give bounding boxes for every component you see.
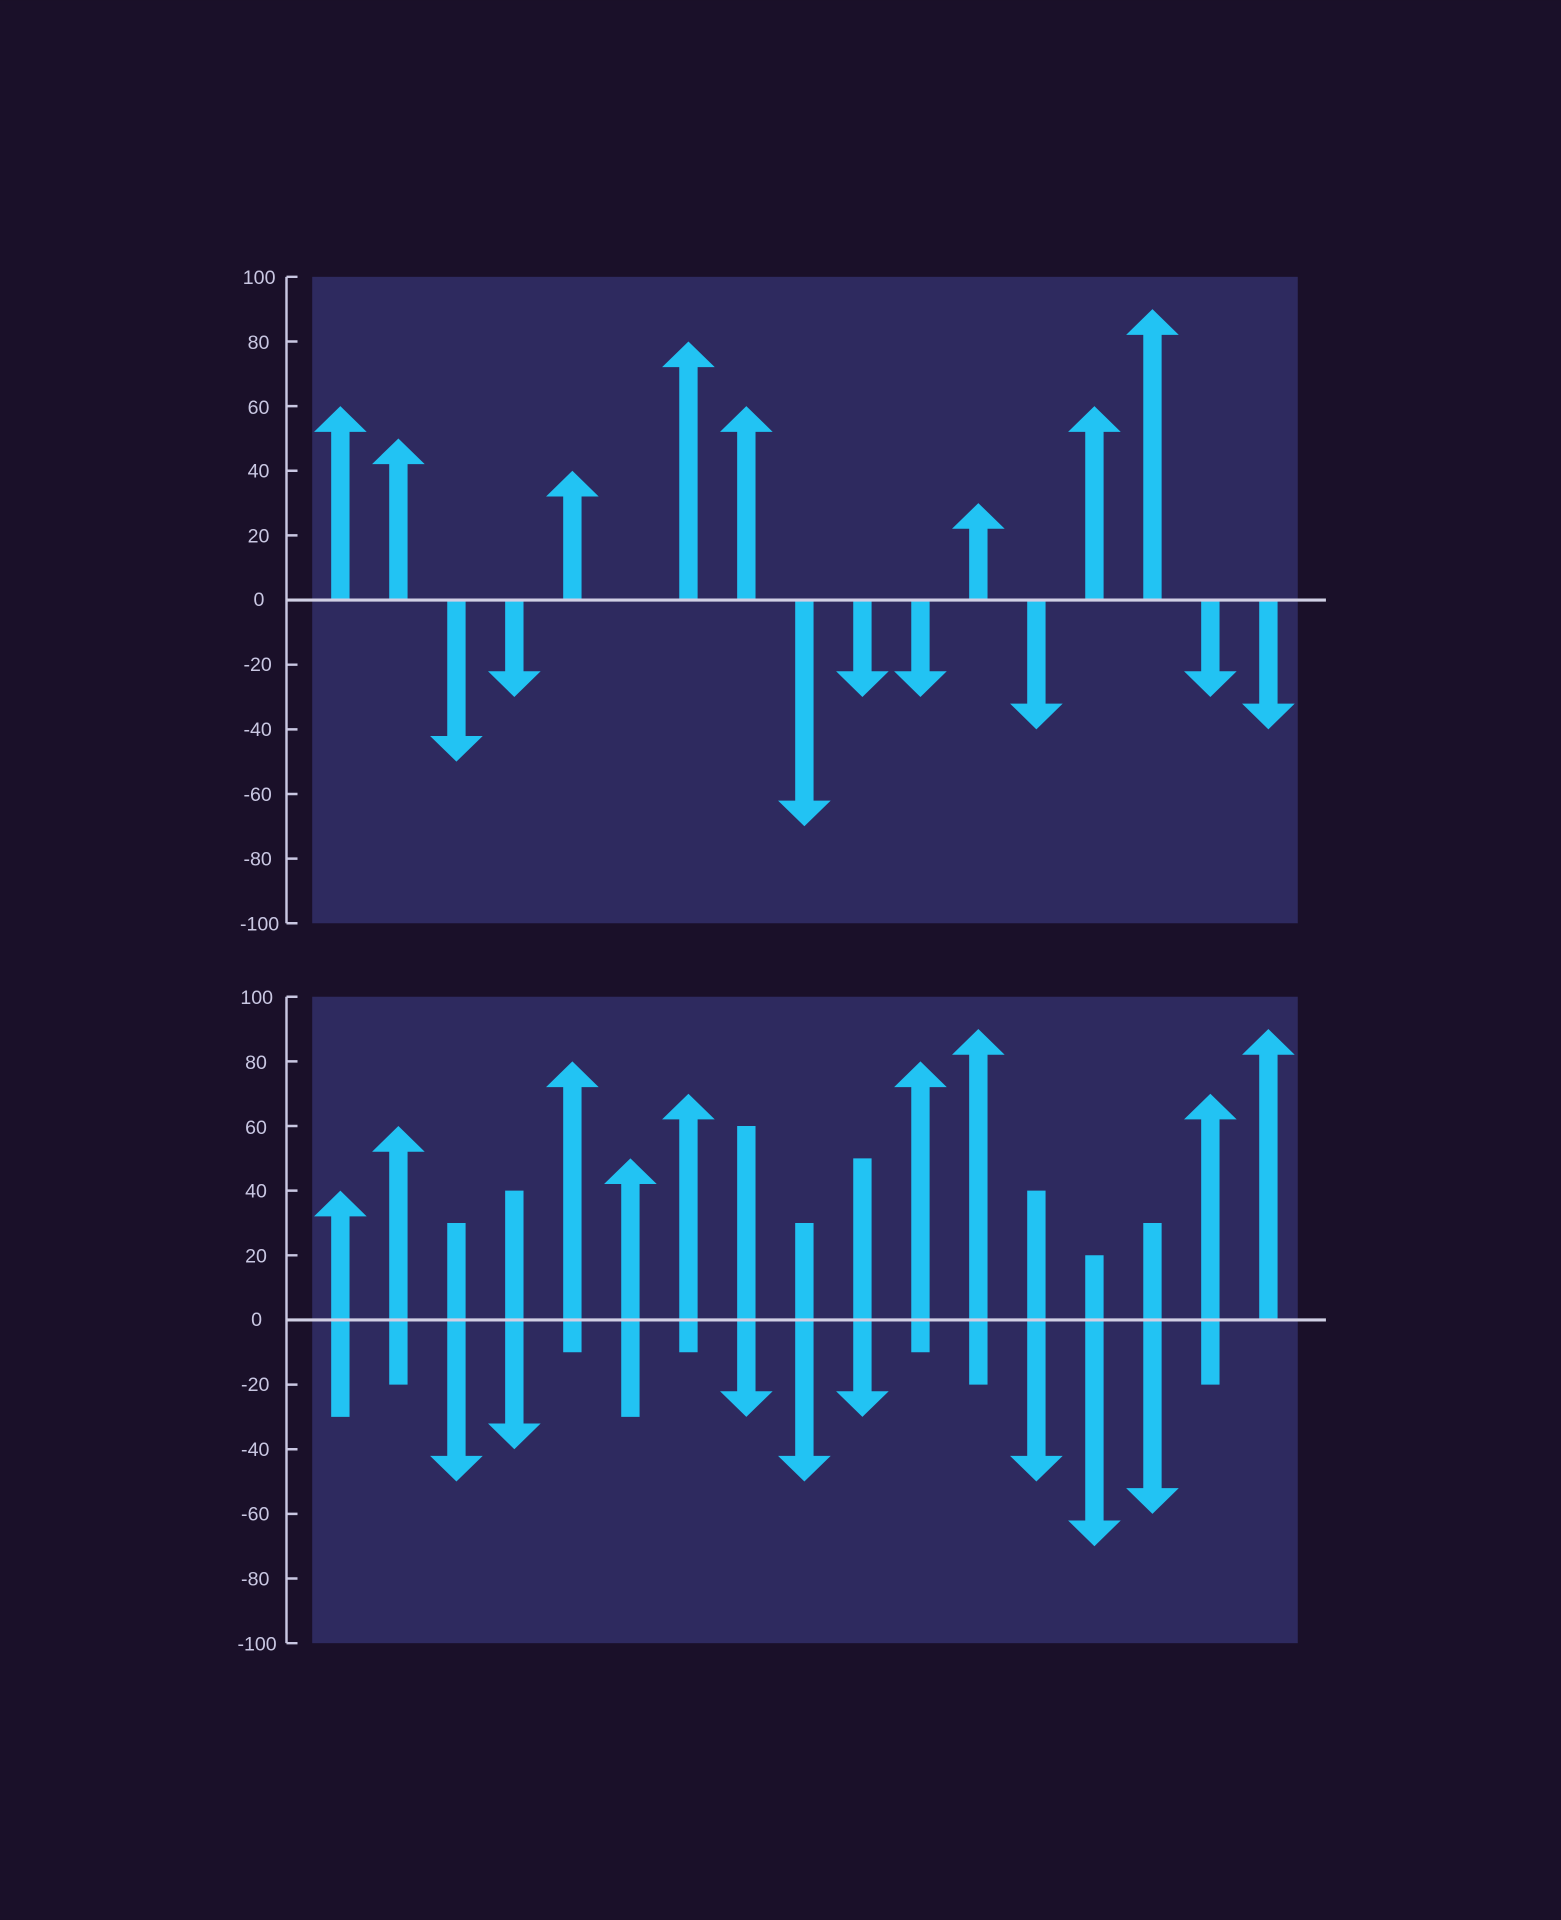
- chart background bottom: [312, 997, 1298, 1643]
- y axis labels bottom: -80: [241, 1569, 269, 1591]
- y axis labels top: -20: [244, 654, 272, 676]
- y axis labels top: -60: [244, 784, 272, 806]
- y axis labels top: 100: [243, 267, 276, 289]
- y axis labels top: [240, 267, 279, 936]
- y axis labels bottom: 60: [245, 1117, 267, 1139]
- chart background top: [312, 277, 1298, 923]
- y axis top: [286, 277, 298, 923]
- y axis labels bottom: -40: [241, 1439, 269, 1461]
- arrows top: [314, 309, 1295, 826]
- y axis labels top: -80: [244, 849, 272, 871]
- y axis labels top: 0: [254, 589, 265, 611]
- y axis labels bottom: -60: [241, 1504, 269, 1526]
- y axis labels top: 40: [248, 461, 269, 483]
- y axis labels top: -100: [240, 914, 279, 936]
- panel: top chart: [240, 267, 1326, 936]
- y axis labels bottom: -100: [238, 1634, 277, 1656]
- panel: bottom chart: [238, 987, 1326, 1656]
- y axis labels bottom: 20: [245, 1245, 267, 1267]
- y axis labels top: -40: [244, 719, 272, 741]
- y axis labels top: 20: [248, 526, 269, 548]
- y axis labels bottom: 80: [245, 1052, 267, 1074]
- y axis labels top: 60: [248, 397, 269, 419]
- zero line bottom: [286, 1319, 1326, 1321]
- zero line top: [286, 599, 1326, 601]
- y axis labels bottom: 0: [251, 1309, 262, 1331]
- arrows bottom: [314, 1029, 1295, 1546]
- y axis bottom: [286, 997, 298, 1643]
- y axis labels bottom: -20: [241, 1374, 269, 1396]
- y axis labels bottom: 100: [240, 987, 273, 1009]
- y axis labels bottom: [238, 987, 277, 1656]
- y axis labels top: 80: [248, 332, 269, 354]
- y axis labels bottom: 40: [245, 1181, 267, 1203]
